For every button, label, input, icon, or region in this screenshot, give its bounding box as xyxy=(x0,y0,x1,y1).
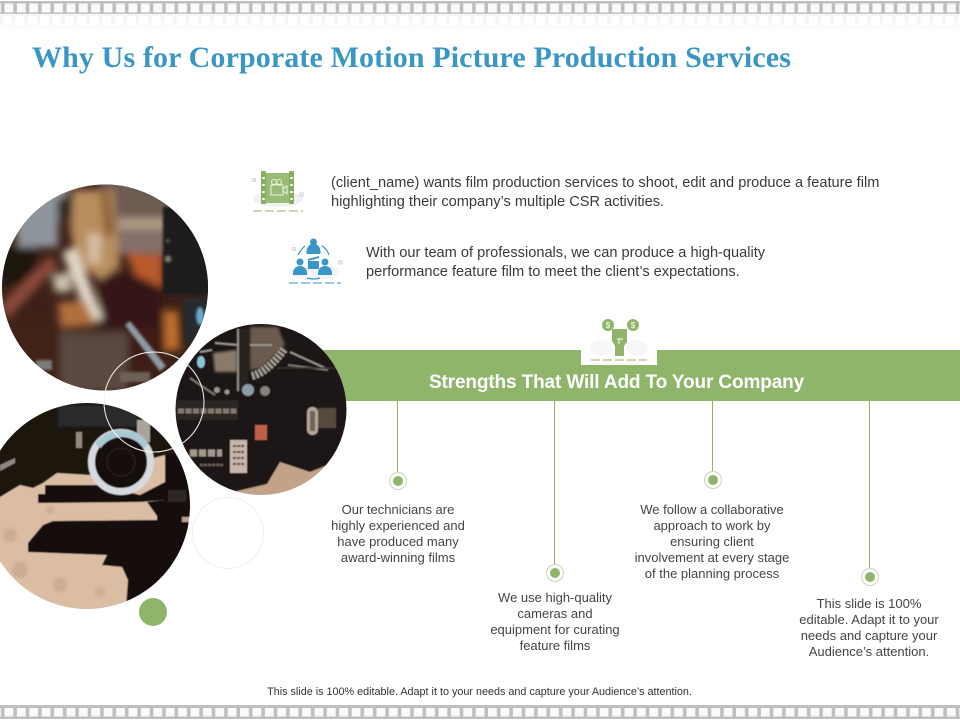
strength 4: needs and capture your xyxy=(801,628,937,643)
green strengths band xyxy=(320,350,960,401)
strength 3: involvement at every stage xyxy=(635,550,789,565)
green dot xyxy=(139,598,167,626)
intro text 2 xyxy=(366,245,765,280)
icon: raised fist with dollar coins on white tab: $ xyxy=(631,321,636,330)
strength 3: ensuring client xyxy=(670,534,754,549)
strength 4: This slide is 100% xyxy=(817,596,921,611)
strength 4: editable. Adapt it to your xyxy=(799,612,939,627)
strength 4: Audience’s attention. xyxy=(809,644,929,659)
faint ring xyxy=(192,498,264,568)
strength 1 xyxy=(331,401,465,565)
strength 1: highly experienced and xyxy=(331,518,465,533)
strength 3: We follow a collaborative xyxy=(640,502,784,517)
strength 3: approach to work by xyxy=(653,518,771,533)
icon: raised fist with dollar coins on white tab: $ xyxy=(606,321,611,330)
icon: film strip with video camera xyxy=(252,171,304,212)
footer note: This slide is 100% editable. Adapt it to your needs and capture your Audience’s attention. xyxy=(267,686,692,698)
icon: raised fist with dollar coins on white tab xyxy=(581,319,657,365)
strength 3 xyxy=(635,401,789,581)
intro text 2: With our team of professionals, we can produce a high-quality xyxy=(366,245,765,261)
intro text 1: highlighting their company’s multiple CSR activities. xyxy=(331,194,664,210)
strength 3: of the planning process xyxy=(645,566,779,581)
strength 2: cameras and xyxy=(517,606,593,621)
strength 1: award-winning films xyxy=(341,550,455,565)
strength 2: equipment for curating xyxy=(490,622,620,637)
intro text 1 xyxy=(331,175,879,210)
strength 1: Our technicians are xyxy=(342,502,454,517)
photo: camera body xyxy=(170,320,350,500)
strength 4 xyxy=(799,401,939,659)
intro text 1: (client_name) wants film production services to shoot, edit and produce a feature film xyxy=(331,175,879,191)
title: Why Us for Corporate Motion Picture Production Services xyxy=(32,41,791,74)
strength 1: have produced many xyxy=(337,534,459,549)
thin white ring xyxy=(104,352,204,452)
intro text 2: performance feature film to meet the client’s expectations. xyxy=(366,264,740,280)
band heading: Strengths That Will Add To Your Company xyxy=(429,372,804,393)
strength 2: We use high-quality xyxy=(498,590,612,605)
photo circles and decorative rings xyxy=(0,184,346,626)
strength 2 xyxy=(490,401,620,653)
icon: team around clapperboard xyxy=(289,238,342,284)
film strip: top xyxy=(0,1,960,22)
film strip: bottom xyxy=(0,705,960,719)
photo: blurred dog and camera xyxy=(0,180,213,395)
strength 2: feature films xyxy=(520,638,590,653)
photo: camera lens on sand xyxy=(0,403,190,609)
